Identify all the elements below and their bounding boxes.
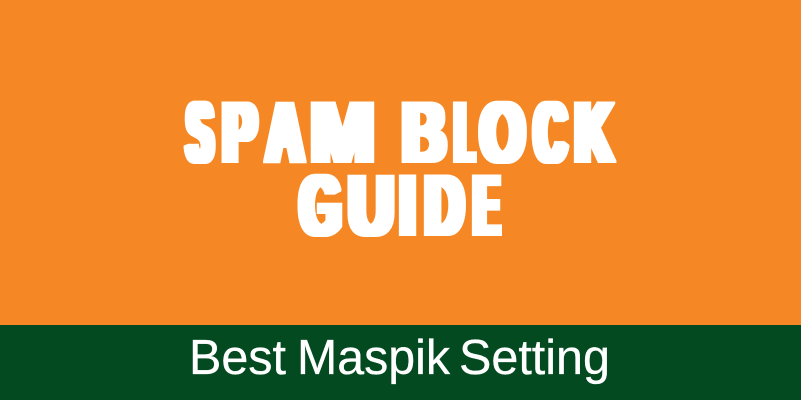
title line 1: P	[223, 85, 256, 181]
title line 2: D	[425, 158, 463, 254]
title line 1: A	[267, 85, 303, 181]
title line 1: C	[535, 85, 566, 181]
title line 1: B	[403, 85, 445, 181]
title line 1: L	[456, 85, 473, 181]
title line 2: I	[400, 158, 415, 254]
title line 1: O	[481, 85, 524, 181]
title line 2: U	[349, 158, 393, 254]
panel: green footer band	[0, 325, 801, 400]
title line 1: S	[188, 85, 212, 181]
title line 1: M	[311, 85, 374, 181]
subtitle: Setting	[459, 331, 610, 385]
title line 1: K	[576, 85, 612, 181]
title: E	[474, 158, 498, 254]
title line 2	[300, 158, 498, 254]
subtitle	[189, 331, 610, 385]
title line 1	[188, 85, 612, 181]
subtitle: Best	[189, 331, 286, 385]
subtitle: Maspik	[297, 331, 450, 385]
title	[188, 85, 612, 254]
title line 2: G	[300, 158, 340, 254]
